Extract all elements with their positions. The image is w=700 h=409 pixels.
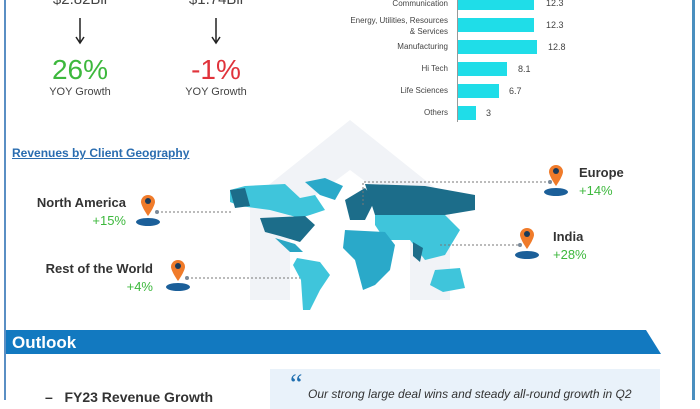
- heading: revenues by geography: Revenues by Client Geography: [12, 146, 189, 160]
- label: india: India: [553, 229, 583, 244]
- text: 3: [486, 108, 491, 118]
- arrow: [211, 18, 221, 44]
- text: 12.3: [546, 20, 564, 30]
- label: rest of world: +4%: [127, 279, 153, 294]
- pins: [136, 165, 568, 291]
- label: north america: [37, 195, 126, 228]
- arrow: [75, 18, 85, 44]
- metric: revenue 1: [49, 0, 111, 98]
- text: 6.7: [509, 86, 522, 96]
- label: europe: Europe: [579, 165, 624, 180]
- label: north america: North America: [37, 195, 126, 210]
- label: europe: [579, 165, 624, 198]
- metric: revenue 1: YOY Growth: [49, 86, 111, 98]
- watermark chevron: [250, 120, 450, 300]
- metric: revenue 2: YOY Growth: [185, 86, 247, 98]
- metric: revenue 1: 26%: [52, 54, 108, 85]
- label: north america: +15%: [92, 213, 126, 228]
- metric: revenue 2: [185, 0, 247, 98]
- dotted connectors: [155, 180, 552, 280]
- outlook header bar: [6, 330, 661, 354]
- text: 8.1: [518, 64, 531, 74]
- label: rest of world: [46, 261, 153, 294]
- world map: [230, 178, 475, 310]
- outlook header bar: Outlook: [12, 333, 77, 352]
- label: rest of world: Rest of the World: [46, 261, 153, 276]
- bar chart: verticals: Life Sciences: [400, 86, 448, 95]
- quote box: Our strong large deal wins and steady all-round growth in Q2: [308, 387, 632, 401]
- bar chart: verticals: [350, 0, 458, 122]
- label: india: +28%: [553, 247, 587, 262]
- bar chart: verticals: Others: [424, 108, 448, 117]
- bar chart: verticals: Hi Tech: [421, 64, 448, 73]
- quote box: [270, 369, 660, 409]
- quote box: “: [290, 369, 302, 400]
- bar chart: verticals: Energy, Utilities, Resources: [350, 16, 448, 25]
- outlook item: – FY23 Revenue Growth: [45, 389, 213, 405]
- metric: revenue 2: -1%: [191, 54, 241, 85]
- text: 12.8: [548, 42, 566, 52]
- label: india: [553, 229, 587, 262]
- label: europe: +14%: [579, 183, 613, 198]
- bar chart: verticals: & Services: [410, 27, 448, 36]
- bar chart: verticals: Manufacturing: [397, 42, 448, 51]
